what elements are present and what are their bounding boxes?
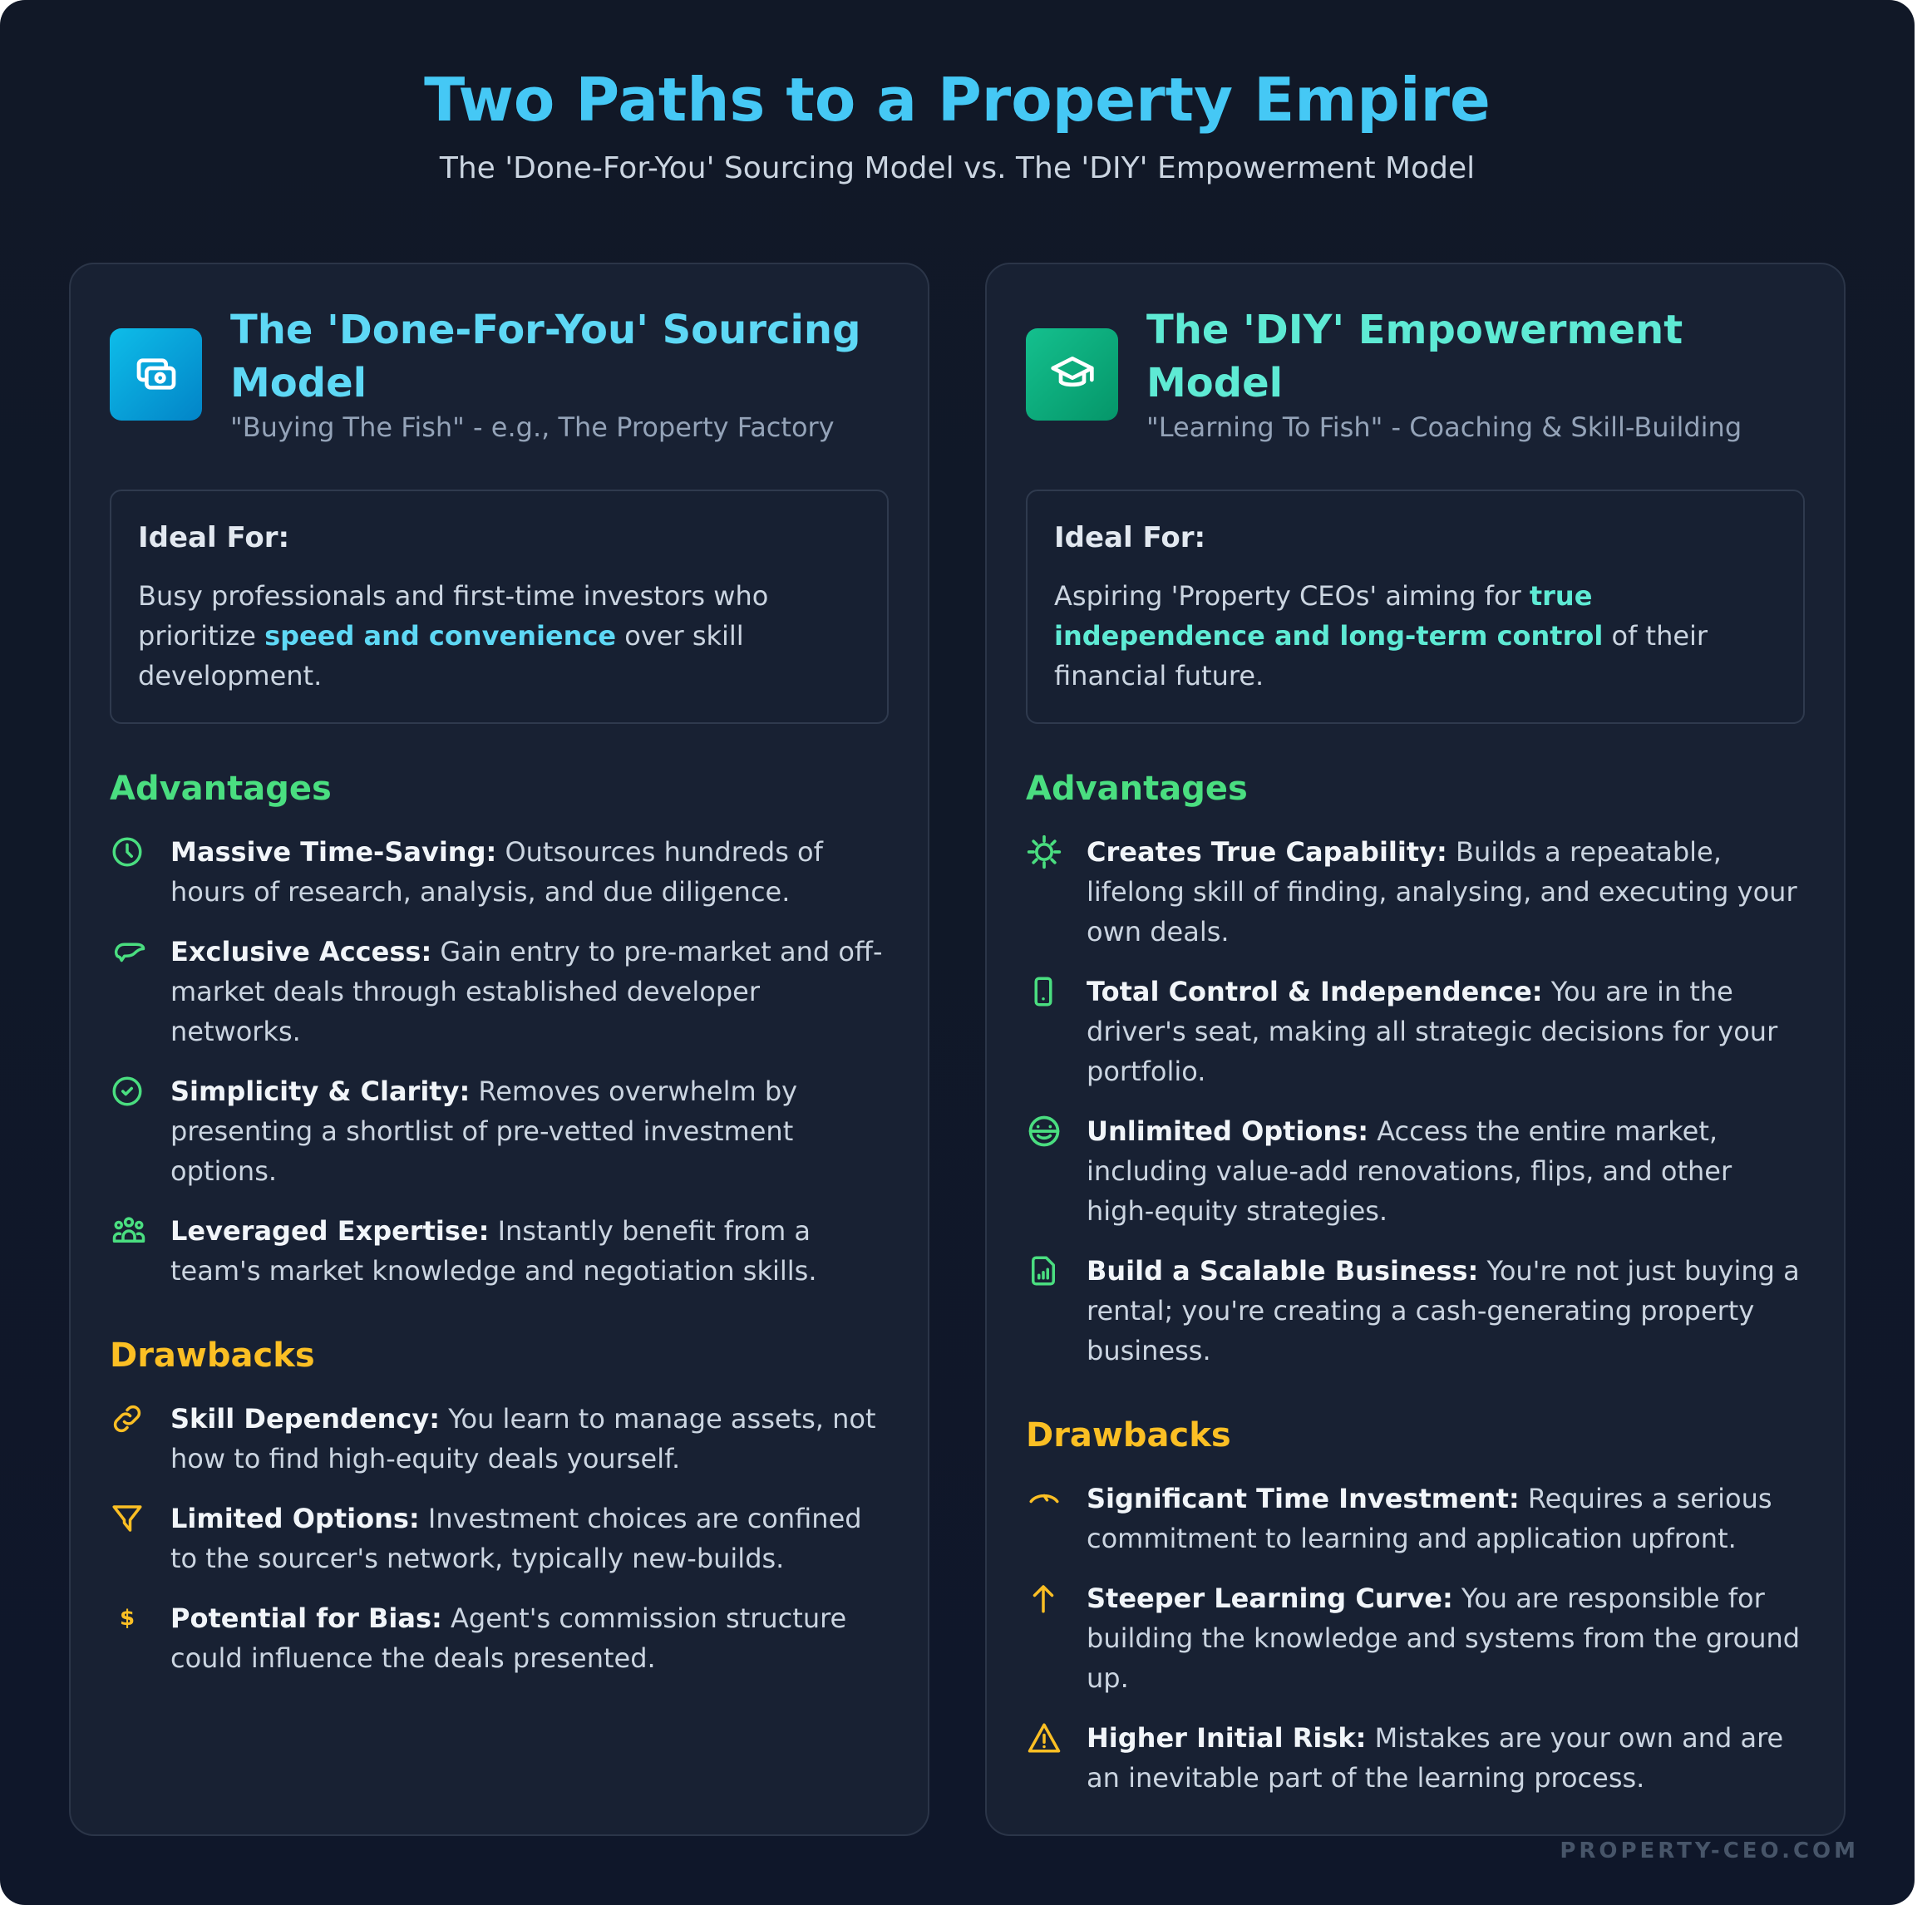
ideal for box: Ideal For: [1054, 521, 1205, 554]
ideal for box: Ideal For: [138, 521, 289, 554]
subtitle: The 'Done-For-You' Sourcing Model vs. The 'DIY' Empowerment Model [440, 151, 1475, 185]
footer brand: PROPERTY-CEO.COM [1560, 1839, 1859, 1863]
advantages list [113, 836, 883, 1287]
ideal for box: Aspiring 'Property CEOs' aiming for true independence and long-term control of their financial future. [1054, 580, 1708, 692]
drawbacks heading: Drawbacks [110, 1336, 315, 1375]
panel header: "Buying The Fish" - e.g., The Property Factory [230, 411, 835, 443]
panel header [110, 307, 860, 443]
drawbacks list [112, 1403, 876, 1674]
advantages heading: Advantages [1026, 770, 1248, 808]
advantages list: Creates True Capability: Builds a repeatable, lifelong skill of finding, analysing, and executing your own deals. [1087, 836, 1797, 948]
advantages list: Unlimited Options: Access the entire market, including value-add renovations, flips, and other high-equity strategies. [1087, 1115, 1732, 1227]
drawbacks list: Higher Initial Risk: Mistakes are your own and are an inevitable part of the learning process. [1087, 1722, 1783, 1794]
ideal for box [110, 490, 889, 724]
advantages list: Exclusive Access: Gain entry to pre-market and off-market deals through established developer networks. [170, 936, 883, 1047]
drawbacks list: $ [120, 1606, 135, 1631]
panel header [1026, 307, 1742, 443]
drawbacks list [1028, 1483, 1800, 1794]
panel: diy [985, 263, 1846, 1836]
panel: done-for-you [69, 263, 929, 1836]
panel header: The 'Done-For-You' Sourcing Model [230, 307, 860, 406]
advantages list [1028, 834, 1800, 1366]
advantages heading: Advantages [110, 770, 332, 808]
advantages list: Build a Scalable Business: You're not just buying a rental; you're creating a cash-generating property business. [1087, 1255, 1800, 1366]
advantages list: Total Control & Independence: You are in the driver's seat, making all strategic decisions for your portfolio. [1087, 976, 1777, 1087]
drawbacks list: Limited Options: Investment choices are confined to the sourcer's network, typically new-builds. [170, 1503, 862, 1574]
drawbacks list: Significant Time Investment: Requires a serious commitment to learning and application upfront. [1087, 1483, 1772, 1554]
title: Two Paths to a Property Empire [424, 65, 1491, 135]
advantages list: Massive Time-Saving: Outsources hundreds of hours of research, analysis, and due diligence. [170, 836, 823, 908]
advantages list: Leveraged Expertise: Instantly benefit from a team's market knowledge and negotiation skills. [170, 1215, 816, 1287]
panel header: "Learning To Fish" - Coaching & Skill-Building [1146, 411, 1742, 443]
advantages list: Simplicity & Clarity: Removes overwhelm by presenting a shortlist of pre-vetted investment options. [170, 1076, 797, 1187]
drawbacks list: Potential for Bias: Agent's commission structure could influence the deals presented. [170, 1602, 846, 1674]
ideal for box [1026, 490, 1805, 724]
drawbacks list: Skill Dependency: You learn to manage assets, not how to find high-equity deals yourself. [170, 1403, 876, 1474]
panel header: The 'DIY' Empowerment Model [1146, 307, 1683, 406]
drawbacks list: Steeper Learning Curve: You are responsible for building the knowledge and systems from the ground up. [1087, 1583, 1800, 1694]
ideal for box: Busy professionals and first-time investors who prioritize speed and convenience over skill development. [138, 580, 768, 692]
drawbacks heading: Drawbacks [1026, 1416, 1231, 1455]
icon: graduation cap [1026, 327, 1118, 421]
icon: money [110, 327, 202, 421]
